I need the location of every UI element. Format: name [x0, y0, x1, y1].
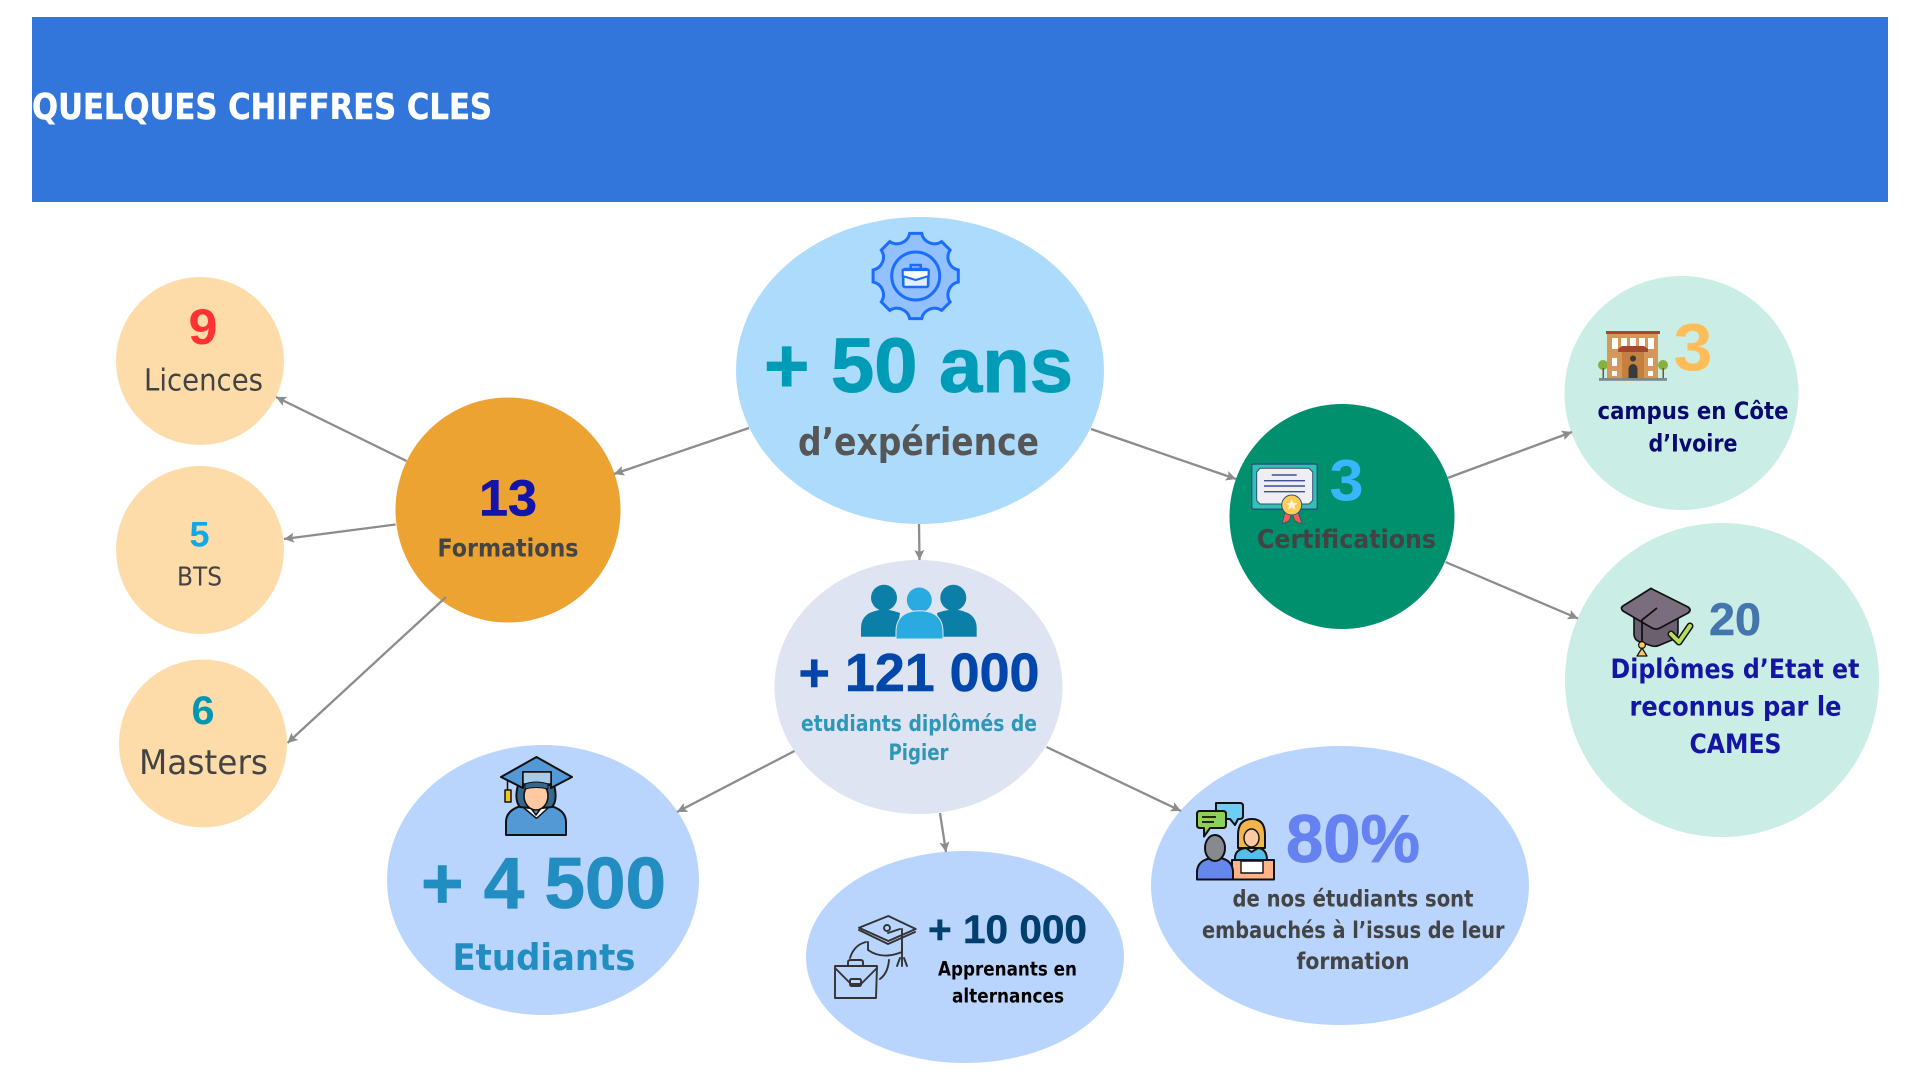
number 9: 9	[188, 299, 218, 355]
label Masters: Masters	[139, 743, 268, 783]
panel: Masters	[119, 660, 287, 828]
number 6: 6	[192, 689, 214, 733]
label: alternances	[952, 984, 1064, 1008]
label diplômes: CAMES	[1690, 729, 1782, 760]
icon: interview at desk	[1197, 803, 1274, 880]
number 20: 20	[1709, 594, 1761, 645]
label diplômes: Diplômes d’Etat et	[1610, 654, 1860, 685]
number 3: 3	[1674, 310, 1712, 386]
title: QUELQUES CHIFFRES CLES	[32, 87, 492, 128]
big number: + 10 000	[928, 908, 1087, 952]
label campus: d’Ivoire	[1648, 430, 1738, 458]
label Certifications: Certifications	[1257, 525, 1436, 555]
panel: 121 000 diplômés	[774, 560, 1062, 814]
panel: campus	[1564, 276, 1798, 510]
big number: 80%	[1286, 801, 1420, 877]
panel: Diplômes d'Etat	[1565, 523, 1879, 837]
label	[1202, 886, 1505, 975]
icon: cap and briefcase	[835, 916, 916, 998]
icon: campus building	[1598, 331, 1668, 381]
label: formation	[1296, 949, 1410, 975]
label: Etudiants	[452, 936, 636, 979]
label	[938, 958, 1077, 1008]
icon: graduate student	[501, 757, 572, 835]
label BTS: BTS	[177, 562, 222, 592]
panel: 10 000 alternants	[806, 851, 1124, 1063]
label campus	[1598, 397, 1788, 458]
icon: gear with briefcase	[873, 233, 958, 319]
panel: Formations	[396, 398, 620, 622]
icon: three people	[861, 585, 977, 639]
big number: + 4 500	[421, 844, 666, 924]
arrows connecting panels	[276, 397, 1578, 852]
label Licences: Licences	[144, 364, 263, 398]
label: etudiants diplômés de	[801, 711, 1037, 737]
panel: BTS	[116, 466, 284, 634]
icon: graduation cap with check	[1622, 588, 1690, 656]
number 3: 3	[1330, 448, 1364, 514]
panel: Licences	[116, 277, 284, 445]
label: d’expérience	[798, 420, 1039, 464]
big number: + 121 000	[798, 643, 1040, 703]
header banner	[32, 17, 1888, 202]
panel: Certifications	[1230, 404, 1454, 629]
icon: certificate	[1252, 464, 1317, 524]
big number: + 50 ans	[764, 323, 1073, 409]
panel: 80% embauchés	[1151, 746, 1529, 1025]
label: de nos étudiants sont	[1232, 886, 1474, 912]
label Formations: Formations	[438, 534, 578, 562]
label diplômes: reconnus par le	[1630, 692, 1842, 722]
panel: 50 ans d'expérience	[736, 217, 1104, 524]
number 13: 13	[479, 470, 537, 526]
label	[801, 711, 1037, 766]
label campus: campus en Côte	[1598, 397, 1788, 425]
panel: 4 500 étudiants	[387, 745, 699, 1015]
label diplômes	[1610, 654, 1860, 760]
label: Pigier	[888, 740, 949, 766]
number 5: 5	[190, 516, 210, 554]
label: embauchés à l’issus de leur	[1202, 918, 1505, 944]
label: Apprenants en	[938, 958, 1077, 980]
